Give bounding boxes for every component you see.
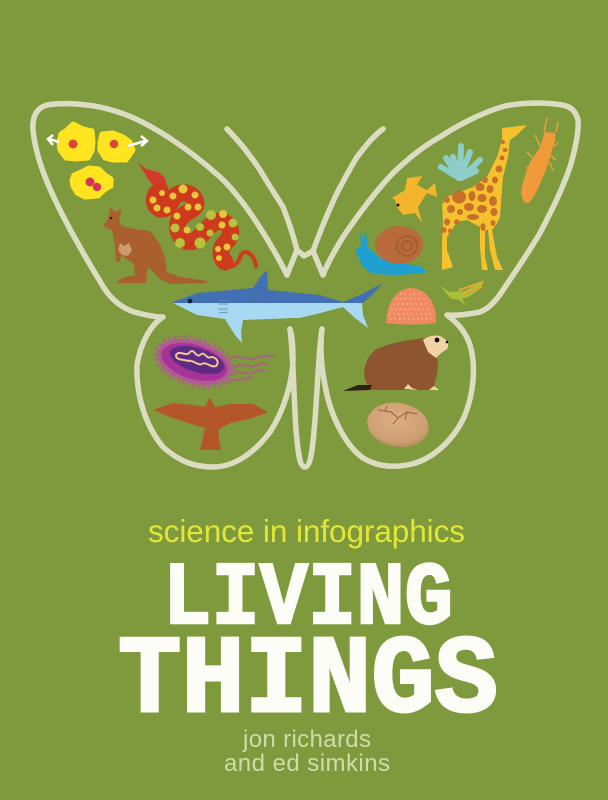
butterfly outline — [33, 103, 578, 467]
icon: bird silhouette — [153, 397, 268, 450]
icon: snake — [137, 162, 256, 267]
icon: termite — [521, 118, 558, 203]
main title: living: LIVING — [163, 549, 453, 650]
icon: frog — [392, 176, 437, 223]
icon: anemone — [441, 146, 480, 178]
icon: grasshopper — [440, 280, 484, 306]
icon: coral — [386, 288, 436, 324]
main title: things: THINGS — [118, 620, 498, 745]
icon: kangaroo — [103, 207, 207, 284]
icon: shark — [173, 270, 383, 343]
icon: bacterium — [152, 331, 273, 393]
icon: yellow flowers — [48, 124, 147, 197]
series title: science in infographics — [148, 513, 465, 549]
author: ed simkins: and ed simkins — [224, 750, 390, 777]
icon: snail — [355, 226, 428, 275]
icon: joey in pouch — [118, 243, 132, 256]
icon: marmot — [343, 336, 448, 391]
icon: giraffe — [442, 125, 527, 270]
author: jon richards: jon richards — [242, 726, 371, 753]
icon: egg-shaped rock — [364, 398, 432, 452]
